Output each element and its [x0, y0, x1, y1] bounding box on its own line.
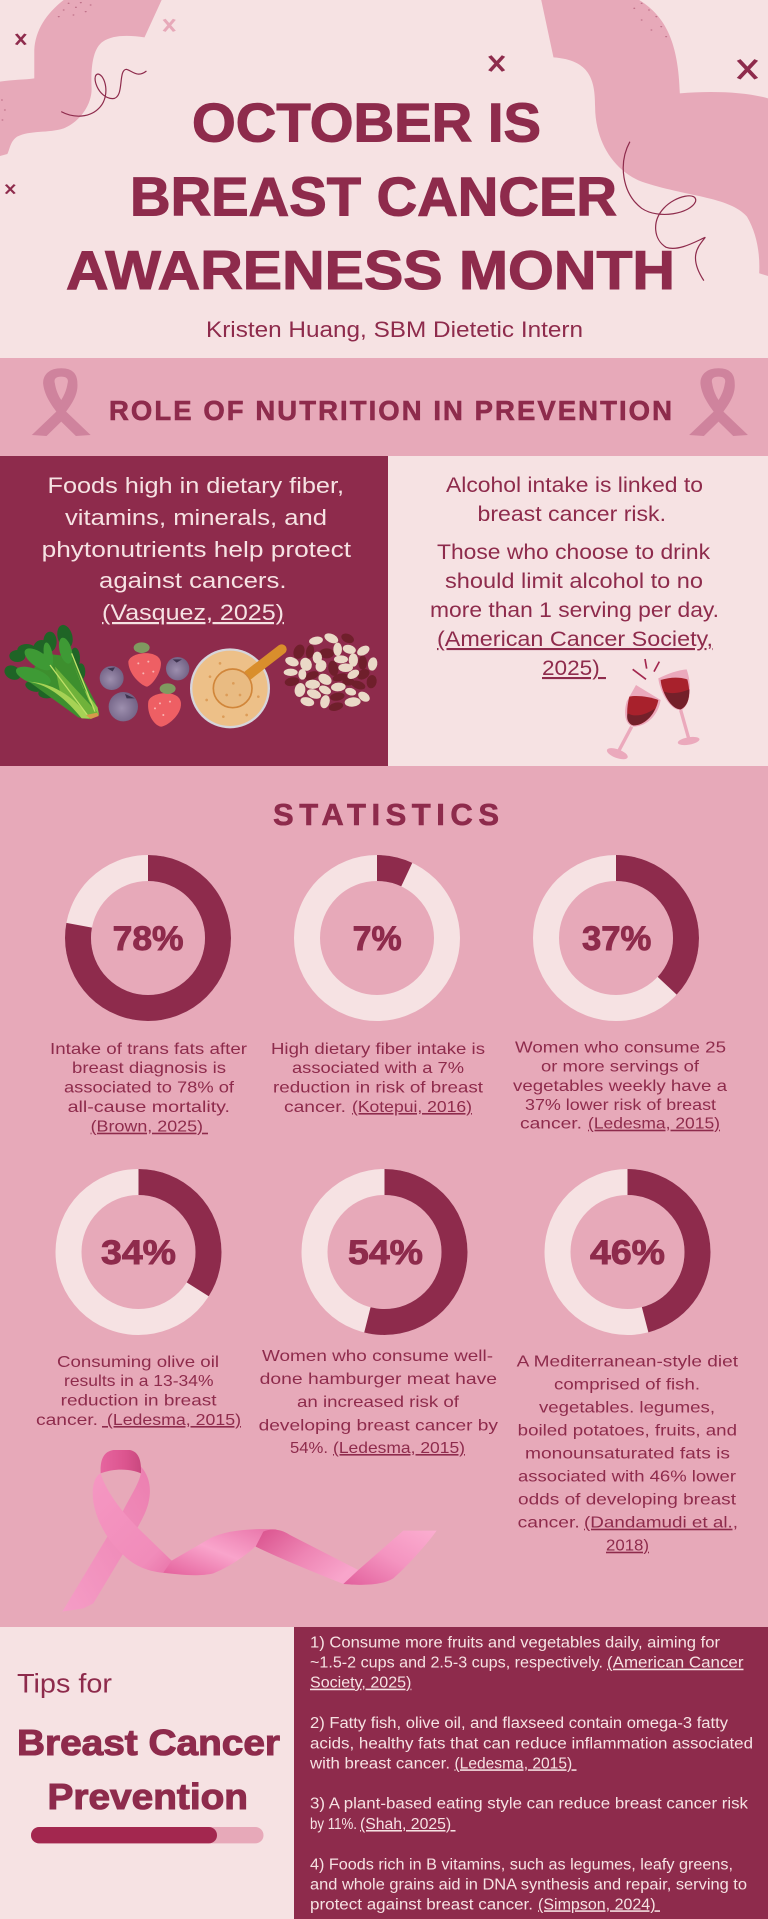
icon: squiggle right [623, 142, 705, 281]
text: mediterranean caption: A Mediterranean-style diet [517, 1354, 739, 1371]
text: olive oil caption: Consuming olive oil [57, 1354, 219, 1371]
tip 2: with breast cancer. [309, 1755, 450, 1772]
text: hamburger caption: 54%. [290, 1440, 328, 1457]
text: olive oil caption: (Ledesma, 2015) [102, 1412, 241, 1429]
text: olive oil caption: cancer. [36, 1412, 98, 1429]
heading: breast cancer prevention: Prevention [48, 1776, 248, 1817]
icon: spinach [2, 623, 99, 719]
text: foods message: (Vasquez, 2025) [102, 600, 284, 625]
text: fiber caption: reduction in risk of breast [273, 1080, 484, 1097]
panel: header [0, 0, 768, 358]
icon: right ribbon [689, 368, 748, 436]
text: fiber caption: High dietary fiber intake is [271, 1041, 485, 1058]
text: vegetables caption: Women who consume 25 [515, 1040, 726, 1057]
icon: beans [284, 631, 378, 712]
tip 1 [310, 1634, 744, 1692]
text: vegetables caption: (Ledesma, 2015) [588, 1116, 720, 1133]
text: trans fats caption: breast diagnosis is [72, 1060, 226, 1077]
panel: tips list [294, 1627, 768, 1919]
text: hamburger caption: done hamburger meat have [260, 1371, 497, 1388]
tip 3: 3) A plant-based eating style can reduce breast cancer risk [310, 1796, 748, 1813]
tip 1: Society, 2025) [310, 1675, 411, 1692]
chart: donut 54%: 54% [348, 1234, 423, 1272]
icon: berries [100, 642, 189, 727]
text: foods message [42, 473, 351, 625]
text: mediterranean caption [517, 1354, 739, 1555]
text: mediterranean caption: odds of developing breast [518, 1492, 737, 1509]
text: alcohol message: more than 1 serving per day. [430, 599, 719, 622]
chart: donut 34%: 34% [101, 1234, 176, 1272]
chart: donut 78%: 78% [113, 920, 184, 958]
title: OCTOBER IS [192, 92, 541, 154]
tip 3: by 11%. [310, 1816, 357, 1833]
text: mediterranean caption: 2018) [606, 1538, 649, 1555]
heading: breast cancer prevention [17, 1722, 280, 1817]
text: mediterranean caption: associated with 46% lower [518, 1469, 737, 1486]
text: olive oil caption [36, 1354, 241, 1429]
icon: squiggle left [61, 69, 146, 116]
text: fiber caption: (Kotepui, 2016) [352, 1099, 472, 1116]
heading: breast cancer prevention: Breast Cancer [17, 1722, 280, 1763]
text: hamburger caption: Women who consume well- [262, 1348, 493, 1365]
text: fiber caption [271, 1041, 485, 1116]
icon: bowl of grains [190, 648, 282, 728]
tip 4 [310, 1856, 747, 1913]
panel: alcohol [388, 456, 768, 766]
text: fiber caption: cancer. [284, 1099, 346, 1116]
chart: donut 7%: 7% [353, 920, 402, 958]
tip 1: 1) Consume more fruits and vegetables daily, aiming for [310, 1634, 720, 1651]
tip 3 [310, 1796, 748, 1833]
tip 2: (Ledesma, 2015) [454, 1755, 576, 1772]
chart: donut 37% [546, 868, 686, 1008]
text: foods message: against cancers. [99, 568, 286, 593]
text: mediterranean caption: vegetables. legumes, [539, 1400, 715, 1417]
text: vegetables caption: cancer. [520, 1116, 582, 1133]
text: alcohol message: should limit alcohol to no [445, 570, 703, 593]
text: mediterranean caption: monounsaturated fats is [525, 1446, 730, 1463]
chart: donut 37%: 37% [582, 920, 651, 958]
text: trans fats caption: all-cause mortality. [68, 1099, 230, 1116]
tip 3: (Shah, 2025) [360, 1816, 456, 1833]
text: hamburger caption: developing breast cancer by [259, 1418, 498, 1435]
text: tips for: Tips for [17, 1669, 112, 1699]
text: mediterranean caption: comprised of fish. [554, 1377, 700, 1394]
text: foods message: Foods high in dietary fiber, [48, 473, 344, 498]
text: olive oil caption: reduction in breast [61, 1393, 217, 1410]
icon: large pink ribbon [62, 1450, 437, 1612]
panel: statistics [0, 766, 768, 1627]
text: alcohol message: Those who choose to drink [437, 541, 711, 564]
text: trans fats caption: (Brown, 2025) [91, 1119, 208, 1136]
chart: donut 7% [307, 868, 447, 1008]
heading: role of nutrition: ROLE OF NUTRITION IN PREVENTION [109, 395, 672, 426]
text: trans fats caption: Intake of trans fats after [50, 1041, 248, 1058]
panel: section banner [0, 358, 768, 456]
chart: donut 46%: 46% [590, 1234, 665, 1272]
text: trans fats caption [50, 1041, 248, 1136]
icon: left ribbon [32, 368, 91, 436]
text: hamburger caption: an increased risk of [297, 1394, 460, 1411]
tip 4: (Simpson, 2024) [538, 1896, 660, 1913]
text: foods message: vitamins, minerals, and [65, 505, 327, 530]
icon: wine glasses [606, 659, 700, 761]
text: vegetables caption [513, 1040, 727, 1133]
text: olive oil caption: results in a 13-34% [64, 1373, 214, 1390]
progress bar [31, 1827, 264, 1843]
tip 2: 2) Fatty fish, olive oil, and flaxseed contain omega-3 fatty [310, 1715, 728, 1732]
chart: donut 78% [78, 868, 218, 1008]
text: alcohol message [430, 474, 719, 680]
tip 2: acids, healthy fats that can reduce inflammation associated [310, 1735, 753, 1752]
text: mediterranean caption: cancer. [518, 1515, 580, 1532]
text: foods message: phytonutrients help protect [42, 537, 351, 562]
text: vegetables caption: vegetables weekly have a [513, 1078, 727, 1095]
title: AWARENESS MONTH [66, 239, 675, 301]
author byline: Kristen Huang, SBM Dietetic Intern [206, 317, 583, 342]
text: mediterranean caption: (Dandamudi et al., [584, 1515, 738, 1532]
tip 4: and whole grains aid in DNA synthesis and repair, serving to [310, 1876, 747, 1893]
title: BREAST CANCER [130, 166, 617, 228]
chart: donut 54% [314, 1182, 454, 1322]
text: alcohol message: 2025) [542, 657, 606, 680]
text: fiber caption: associated with a 7% [292, 1060, 464, 1077]
chart: donut 34% [68, 1182, 208, 1322]
text: hamburger caption: (Ledesma, 2015) [333, 1440, 465, 1457]
text: vegetables caption: or more servings of [541, 1059, 700, 1076]
text: alcohol message: Alcohol intake is linked to [446, 474, 703, 497]
title [66, 92, 675, 301]
heading: statistics: STATISTICS [273, 797, 499, 832]
tip 4: 4) Foods rich in B vitamins, such as legumes, leafy greens, [310, 1856, 733, 1873]
text: mediterranean caption: boiled potatoes, fruits, and [518, 1423, 737, 1440]
tip 4: protect against breast cancer. [310, 1896, 533, 1913]
icon: star marks [6, 19, 756, 194]
chart: donut 46% [558, 1182, 698, 1322]
text: vegetables caption: 37% lower risk of breast [525, 1097, 717, 1114]
tip 1: (American Cancer [607, 1655, 744, 1672]
text: trans fats caption: associated to 78% of [64, 1080, 235, 1097]
decorative blob: top left [0, 0, 162, 156]
decorative blob: top right [541, 0, 768, 276]
text: hamburger caption [259, 1348, 498, 1457]
tip 1: ~1.5-2 cups and 2.5-3 cups, respectively. [310, 1655, 603, 1672]
panel: tips heading [0, 1627, 294, 1919]
text: alcohol message: (American Cancer Society, [437, 628, 713, 651]
text: alcohol message: breast cancer risk. [478, 503, 666, 526]
tip 2 [309, 1715, 753, 1772]
panel: protective foods [0, 456, 388, 766]
